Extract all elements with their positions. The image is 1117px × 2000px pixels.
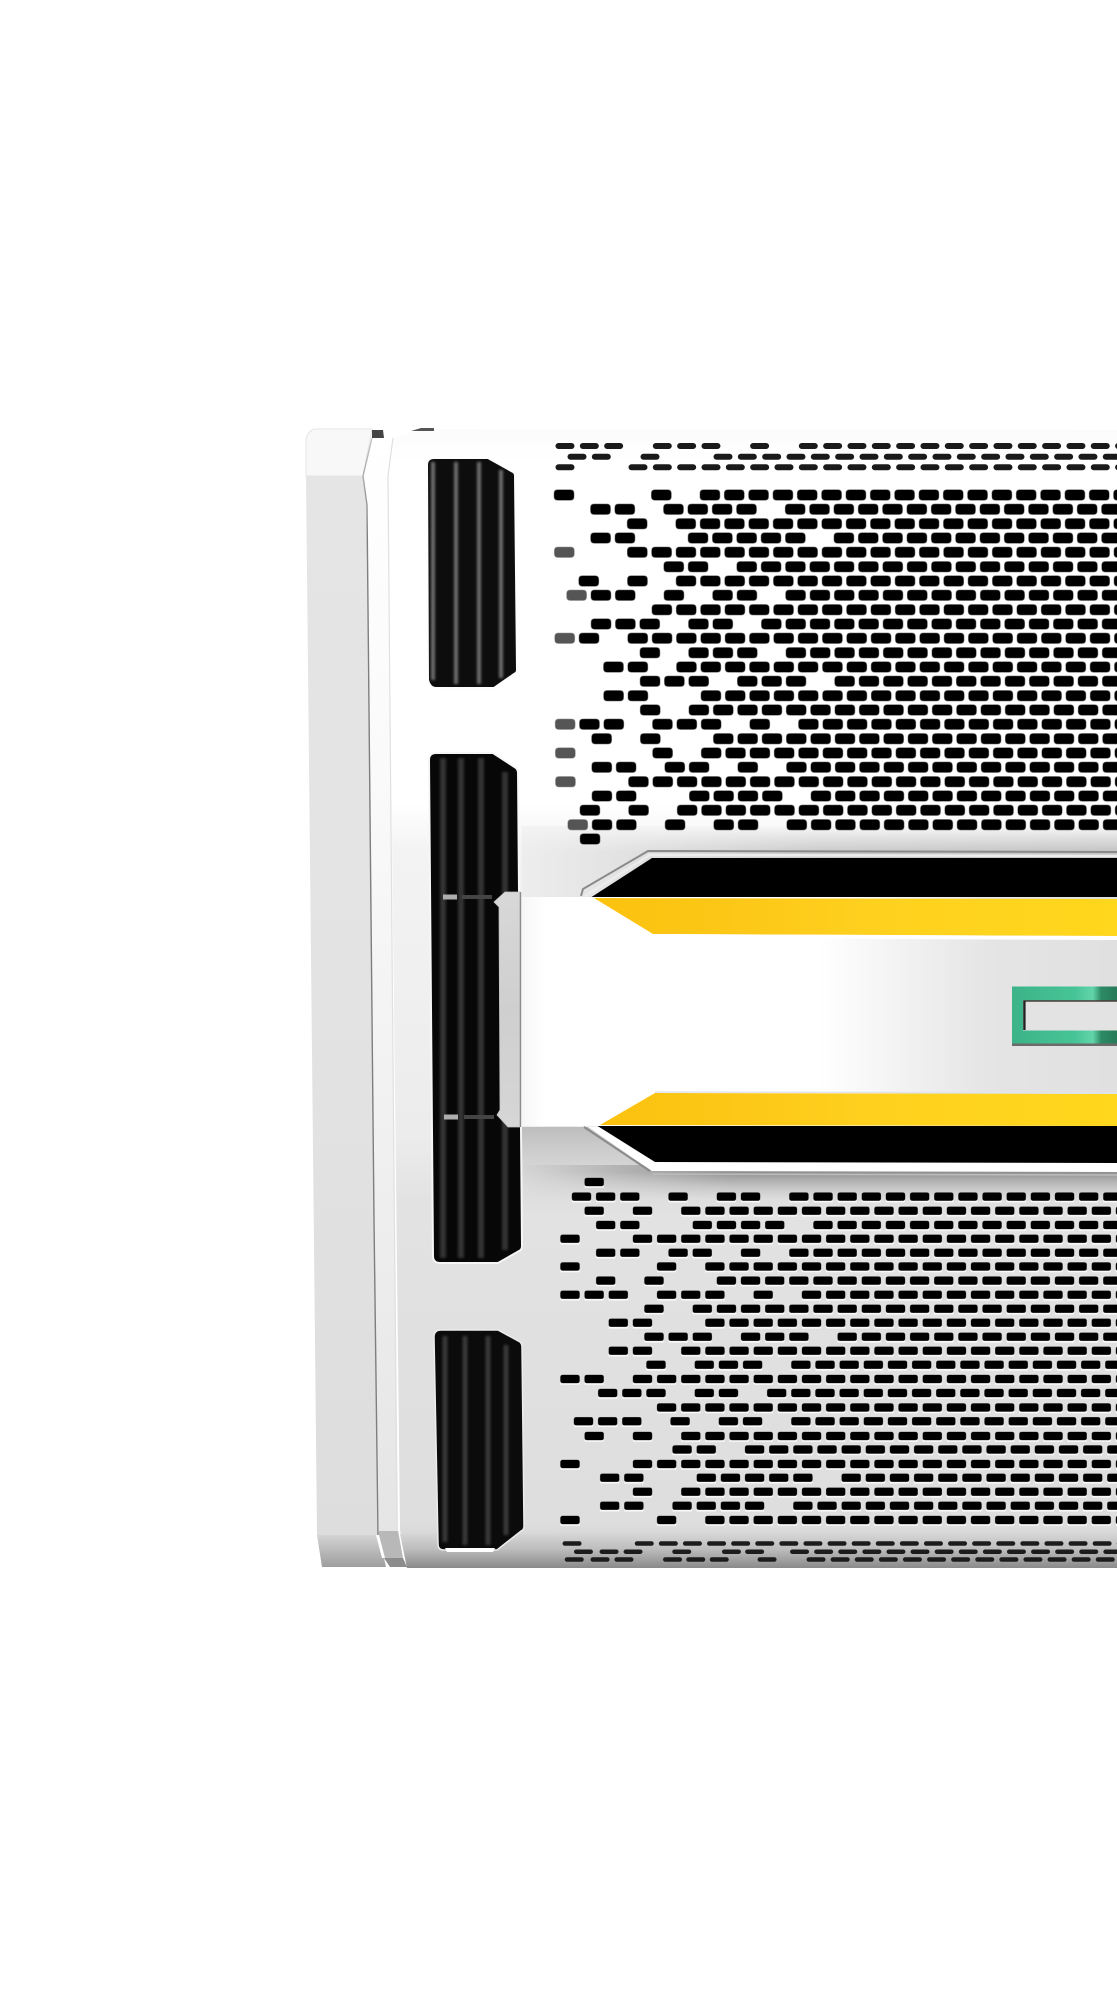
panel: left end cap xyxy=(306,429,386,1567)
panel: lower black window xyxy=(584,1125,1117,1175)
panel: shaded band above handle xyxy=(522,826,1117,898)
panel: chassis front plate xyxy=(388,429,1117,1568)
panel: bar left section edge xyxy=(520,892,522,1127)
panel: lower yellow stripe xyxy=(600,1092,1117,1126)
panel: upper top perforation row band xyxy=(558,446,1117,467)
panel: vertical seam strip xyxy=(363,428,434,1567)
panel: top edge highlights xyxy=(396,431,1117,477)
panel: upper black window xyxy=(581,851,1117,899)
icon: bottom vent slot xyxy=(434,1330,524,1552)
panel: lower perforated mesh xyxy=(564,1182,1117,1522)
panel: bottom perforation row band xyxy=(565,1544,1117,1560)
icon: handle side bracket xyxy=(494,892,520,1127)
panel: bottom lip xyxy=(400,1530,1117,1568)
panel: white handle bar xyxy=(521,897,1117,1126)
icon: green element logo xyxy=(1012,986,1117,1046)
panel: upper perforated mesh xyxy=(559,495,1117,839)
panel: shaded area below handle xyxy=(522,1127,1117,1198)
icon: middle vent slot xyxy=(429,753,522,1263)
icon: top vent slot xyxy=(427,458,517,688)
illustration: server chassis front xyxy=(306,428,1117,1568)
panel: upper yellow stripe xyxy=(594,898,1117,938)
